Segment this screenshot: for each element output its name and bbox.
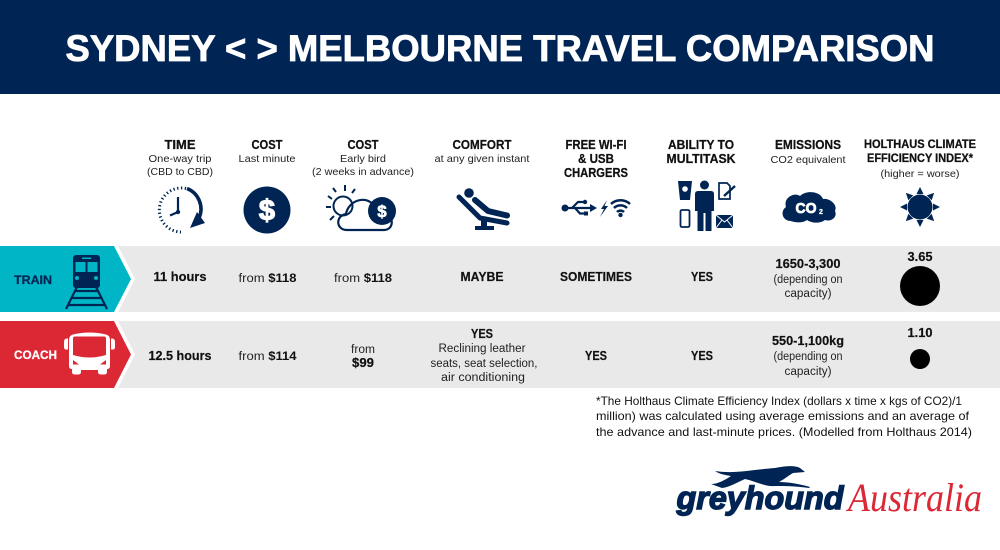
column: free wifi and usb bbox=[562, 138, 630, 217]
column: cost early bird bbox=[312, 138, 414, 230]
coach values: 1.10 bbox=[908, 326, 933, 340]
train label arrow: TRAIN bbox=[14, 273, 52, 287]
column: time: (CBD to CBD) bbox=[147, 166, 213, 178]
icon: person with coffee, phone, note and mail bbox=[678, 180, 735, 231]
column: cost early bird: COST bbox=[348, 138, 379, 152]
coach values: $99 bbox=[352, 356, 374, 370]
train values: (depending on bbox=[774, 274, 842, 286]
row background bbox=[118, 246, 1000, 312]
icon: train bbox=[66, 255, 107, 309]
column: climate efficiency index: EFFICIENCY INDEX* bbox=[867, 153, 973, 165]
column: emissions bbox=[770, 138, 846, 223]
logo: Australia script: Australia bbox=[845, 475, 982, 520]
coach label arrow bbox=[0, 321, 131, 388]
train values: from $118 bbox=[238, 273, 297, 285]
footnote bbox=[596, 394, 972, 439]
column: emissions: EMISSIONS bbox=[775, 138, 841, 152]
coach values: YES bbox=[585, 349, 607, 363]
coach values: YES bbox=[471, 327, 493, 341]
coach values: air conditioning bbox=[441, 372, 525, 384]
logo: running greyhound bbox=[711, 466, 810, 488]
train values: 11 hours bbox=[154, 270, 207, 284]
train values: 1650-3,300 bbox=[776, 257, 841, 271]
icon: clock bbox=[159, 188, 205, 232]
coach values: Reclining leather bbox=[438, 343, 526, 355]
title: SYDNEY < > MELBOURNE TRAVEL COMPARISON bbox=[66, 28, 934, 69]
train index circle bbox=[900, 266, 940, 306]
train values: capacity) bbox=[784, 288, 832, 300]
train label arrow bbox=[0, 246, 131, 312]
logo: greyhound wordmark: greyhound bbox=[675, 480, 845, 516]
coach values: (depending on bbox=[774, 351, 842, 363]
footnote: the advance and last-minute prices. (Modelled from Holthaus 2014) bbox=[596, 425, 972, 439]
coach values: from bbox=[351, 344, 375, 356]
row: coach bbox=[0, 321, 1000, 388]
column: free wifi and usb: & USB bbox=[578, 152, 614, 166]
column: emissions: CO2 equivalent bbox=[770, 154, 846, 166]
column: multitask: ABILITY TO bbox=[668, 138, 734, 152]
icon: usb, bolt and wifi bbox=[562, 200, 630, 217]
column: free wifi and usb: CHARGERS bbox=[564, 166, 628, 180]
header banner bbox=[0, 0, 1000, 94]
icon: sun, cloud and coin: $ bbox=[377, 202, 387, 221]
coach values: seats, seat selection, bbox=[430, 358, 538, 370]
row background bbox=[118, 321, 1000, 388]
column: comfort bbox=[434, 138, 530, 230]
column: cost last minute: Last minute bbox=[238, 153, 296, 165]
column: multitask bbox=[666, 138, 736, 231]
column: comfort: at any given instant bbox=[434, 153, 530, 165]
coach values: YES bbox=[691, 349, 713, 363]
coach values: capacity) bbox=[784, 366, 832, 378]
column: time: One-way trip bbox=[148, 153, 212, 165]
coach index circle bbox=[910, 349, 930, 369]
train values: YES bbox=[691, 270, 713, 284]
icon: CO2 cloud bbox=[783, 192, 836, 223]
logo: greyhound Australia bbox=[675, 466, 982, 520]
icon: reclining seat bbox=[459, 188, 507, 230]
column: climate efficiency index: (higher = worse) bbox=[880, 168, 960, 180]
column: cost early bird: (2 weeks in advance) bbox=[312, 166, 414, 178]
icon: sun bbox=[892, 179, 948, 235]
train values: MAYBE bbox=[460, 270, 504, 284]
icon: CO2 cloud: 2 bbox=[819, 209, 823, 216]
column: time bbox=[147, 138, 213, 232]
column: multitask: MULTITASK bbox=[666, 152, 736, 166]
footnote: *The Holthaus Climate Efficiency Index (dollars x time x kgs of CO2)/1 bbox=[596, 394, 962, 408]
icon: coach bbox=[64, 332, 115, 374]
coach values bbox=[148, 326, 933, 384]
column: comfort: COMFORT bbox=[452, 138, 512, 152]
footnote: million) was calculated using average emissions and an average of bbox=[596, 409, 970, 423]
train values bbox=[154, 250, 940, 306]
coach values: from $114 bbox=[238, 351, 297, 363]
column: time: TIME bbox=[164, 138, 196, 152]
column: climate efficiency index bbox=[864, 139, 976, 235]
icon: dollar coin: $ bbox=[259, 195, 275, 227]
column: climate efficiency index: HOLTHAUS CLIMATE bbox=[864, 139, 976, 151]
column: cost early bird: Early bird bbox=[340, 153, 386, 165]
train values: 3.65 bbox=[908, 250, 933, 264]
train values: from $118 bbox=[334, 273, 393, 285]
coach values: 550-1,100kg bbox=[772, 334, 844, 348]
row: train bbox=[0, 246, 1000, 312]
column: cost last minute: COST bbox=[252, 138, 283, 152]
coach values: 12.5 hours bbox=[148, 349, 212, 363]
column: free wifi and usb: FREE WI-FI bbox=[566, 138, 626, 152]
icon: CO2 cloud: CO bbox=[796, 200, 817, 217]
coach label arrow: COACH bbox=[14, 348, 57, 362]
train values: SOMETIMES bbox=[560, 270, 632, 284]
column: cost last minute bbox=[238, 138, 296, 234]
